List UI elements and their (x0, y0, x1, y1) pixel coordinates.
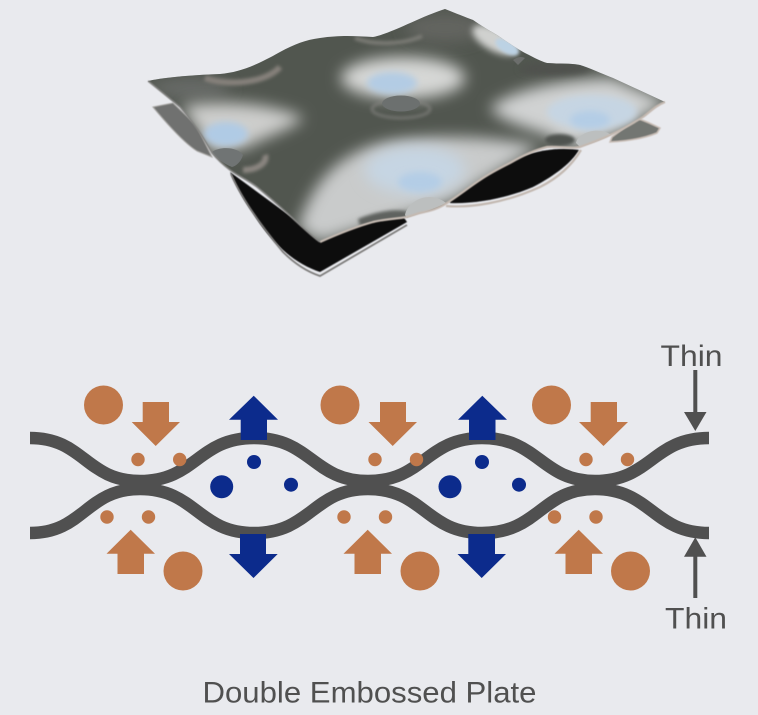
light patch: centre (341, 57, 465, 99)
contact disc: right (576, 131, 611, 147)
shaded streak: upper middle (355, 36, 422, 43)
grey sheen: left corner (150, 78, 230, 98)
blue down arrows (229, 534, 506, 578)
bottom wavy plate (30, 489, 709, 533)
pale blue wash: front (365, 146, 465, 194)
black cavity right (450, 149, 579, 203)
surface base (148, 9, 665, 242)
lower plate rim (231, 174, 407, 276)
blue dimple: top right (496, 38, 521, 58)
pale blue wash: right (547, 95, 637, 129)
light patch: top right (468, 22, 522, 60)
contact disc: centre (382, 96, 420, 112)
3D double embossed plate (140, 0, 680, 276)
thin arrow: top (684, 370, 706, 431)
upper plate surface (148, 9, 665, 242)
light patch: right (490, 78, 668, 147)
label: Thin bottom: Thin (665, 602, 727, 636)
shaded ring: lower left (243, 155, 266, 170)
small orange circles (100, 453, 634, 524)
cavity lower rim (446, 150, 581, 206)
orange fluid: outer side (84, 386, 650, 590)
shaded ring: upper left (205, 67, 280, 83)
orange up arrows (106, 530, 603, 574)
blue fluid: inner channel (210, 396, 526, 578)
upper plate rim (320, 102, 665, 242)
contact disc: front (405, 197, 446, 218)
contact disc: left (212, 148, 243, 167)
lower plate right corner (610, 118, 660, 142)
lower plate left corner (153, 103, 212, 157)
grey sheen: top peak (405, 14, 485, 42)
label: Thin top: Thin (660, 340, 722, 373)
large orange circles (84, 386, 650, 590)
blue dimple: front (398, 172, 442, 192)
blue dimple: right (570, 111, 610, 129)
orange down arrows (132, 402, 628, 446)
shaded ring: centre (372, 100, 430, 118)
blue dimple: centre (367, 72, 417, 94)
top wavy plate (30, 438, 709, 481)
blue circles (210, 455, 526, 498)
light patch: front (298, 137, 540, 242)
thin arrow: bottom (684, 537, 706, 598)
cross-section diagram (30, 340, 727, 636)
dark shading: right dimple (545, 134, 575, 146)
blue dimple: left (204, 122, 248, 146)
dark shading: front corner (358, 210, 408, 226)
dark shading: top right dimple (519, 63, 591, 75)
contact disc: top right (513, 57, 525, 65)
black cavity front (230, 172, 407, 272)
upper plate left rim (148, 81, 320, 242)
light patch: left (182, 103, 304, 153)
caption: Double Embossed Plate (202, 676, 536, 709)
blue up arrows (229, 396, 507, 440)
